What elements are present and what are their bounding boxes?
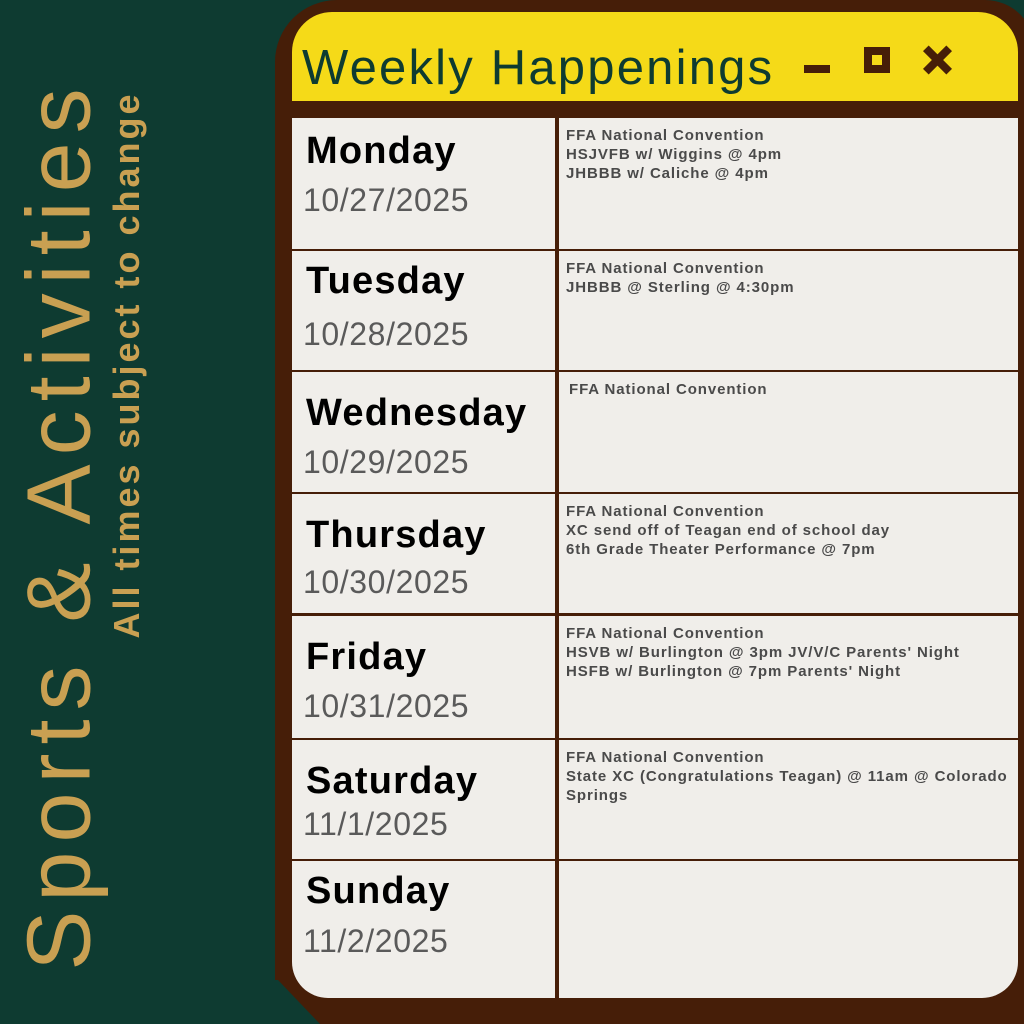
row: Wednesday: FFA National Convention [569,381,767,398]
row: Saturday: FFA National Convention [566,749,764,766]
row: Monday [292,118,1018,249]
icon: maximize [864,47,890,73]
row: Thursday [292,494,1018,613]
row: Monday: JHBBB w/ Caliche @ 4pm [566,165,769,182]
row: Thursday: 6th Grade Theater Performance @ 7pm [566,541,876,558]
row: Saturday: Saturday [306,760,478,802]
row: Sunday: 11/2/2025 [303,923,448,959]
row: Friday: HSVB w/ Burlington @ 3pm JV/V/C Parents' Night [566,644,960,661]
row: Tuesday: FFA National Convention [566,260,764,277]
schedule table [292,118,1018,998]
row: Sunday [292,861,1018,998]
row: Wednesday [292,372,1018,492]
row: Saturday [292,740,1018,859]
row: Saturday: Springs [566,787,628,804]
row: Monday: 10/27/2025 [303,182,469,218]
row: Monday: FFA National Convention [566,127,764,144]
row: Tuesday: 10/28/2025 [303,316,469,352]
row: Friday: FFA National Convention [566,625,764,642]
row: Thursday: Thursday [306,514,487,556]
vertical title: Sports & Activities: Sports & Activities [10,79,110,971]
row: Friday: 10/31/2025 [303,688,469,724]
row: Saturday: 11/1/2025 [303,806,448,842]
sidebar title [10,79,147,971]
row: Saturday: State XC (Congratulations Teagan) @ 11am @ Colorado [566,768,1008,785]
heading: Weekly Happenings [302,41,774,95]
bottom shadow cutout [275,980,320,1024]
subtitle: all times subject to change: All times subject to change [106,91,147,639]
row: Tuesday: Tuesday [306,260,466,302]
row: Monday: HSJVFB w/ Wiggins @ 4pm [566,146,782,163]
row: Thursday: XC send off of Teagan end of school day [566,522,890,539]
row: Monday: Monday [306,130,457,172]
row: Wednesday: Wednesday [306,392,527,434]
row: Tuesday: JHBBB @ Sterling @ 4:30pm [566,279,794,296]
row: Thursday: 10/30/2025 [303,564,469,600]
row: Friday: Friday [306,636,427,678]
icon: minimize [804,65,830,73]
row: Friday [292,616,1018,738]
header bar [292,12,1018,101]
row: Tuesday [292,251,1018,370]
icon: close [923,46,952,74]
brown window frame [275,0,1024,1024]
row: Sunday: Sunday [306,870,450,912]
row: Thursday: FFA National Convention [566,503,764,520]
row: Wednesday: 10/29/2025 [303,444,469,480]
row: Friday: HSFB w/ Burlington @ 7pm Parents' Night [566,663,901,680]
